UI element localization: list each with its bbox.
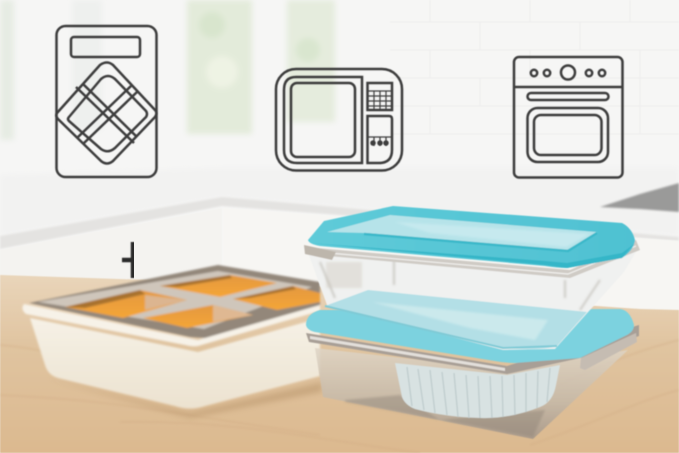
metal tray <box>29 265 320 338</box>
icon: microwave <box>276 69 402 170</box>
cream rim <box>22 303 320 346</box>
brick wall pattern <box>390 0 679 134</box>
upper clear container with blue lid <box>304 206 640 350</box>
orange compartment B <box>160 275 277 297</box>
orange compartment D <box>143 305 253 328</box>
back counter top <box>0 168 679 236</box>
orange compartment C <box>233 286 320 310</box>
white ribbed dish <box>395 363 560 418</box>
handle <box>580 333 637 370</box>
lower box body <box>315 348 628 439</box>
upper blue lid <box>308 206 635 268</box>
lower clear container with blue lid <box>306 309 639 439</box>
cabinet handle <box>122 242 133 278</box>
wooden table <box>0 275 679 453</box>
orange compartment A <box>65 290 187 318</box>
window with blurred greenery <box>0 0 335 140</box>
lower blue lid <box>306 309 634 363</box>
counter edge <box>0 197 679 249</box>
glass bottom with blue tint <box>325 290 587 349</box>
lower cabinets <box>0 208 222 282</box>
lid clear panel <box>327 215 597 250</box>
container body <box>30 318 320 408</box>
icon: oven <box>514 57 622 178</box>
icon: cutting board with grid <box>56 26 157 177</box>
cooktop <box>600 183 679 212</box>
beige container with orange compartments <box>22 265 320 408</box>
table shadow <box>45 378 322 418</box>
glass rim <box>305 240 640 278</box>
glass body <box>306 247 636 350</box>
gray rim <box>306 325 639 374</box>
